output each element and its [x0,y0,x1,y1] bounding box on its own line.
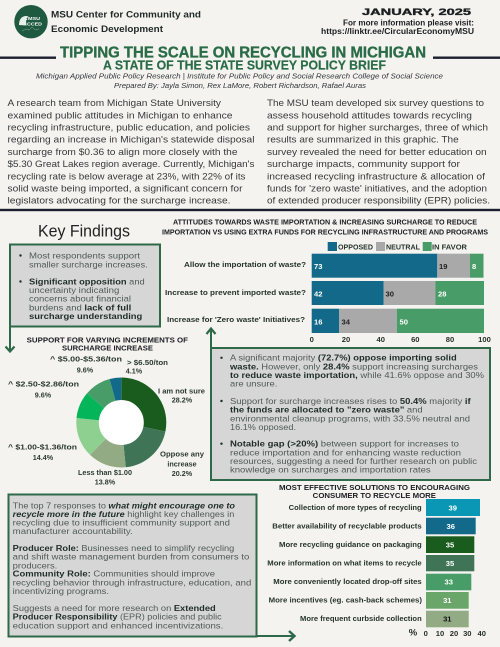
panel: key findings callout: Most respondents support [29,250,141,260]
axis: percent scale: 100 [478,335,491,344]
arrow: callout right to solutions chart [257,631,294,641]
bar chart: most effective solutions [267,499,486,638]
row: information on items: 35 [446,559,455,568]
row: collection of more types [289,499,480,516]
heading: attitudes chart title: ATTITUDES TOWARDS WASTE IMPORTATION & INCREASING SURCHARGE TO REDUCE [173,217,477,226]
panel: attitudes callout: resources, suggesting a need for further research on public [230,456,478,466]
heading: key findings: Key Findings [38,223,130,241]
panel: attitudes callout [211,348,490,480]
icon: MSU CCED logo: CCED [27,22,42,26]
donut chart labels: 13.8% [95,478,116,487]
date and link block: JANUARY, 2025 [362,7,471,17]
heading: solutions chart title: CONSUMER TO RECYCLE MORE [313,491,436,500]
row: collection of more types: 39 [448,504,457,512]
row: better availability [272,518,476,534]
panel: attitudes callout: to reduce waste importation, while 41.6% oppose and 30% [230,370,484,380]
panel: key findings callout: concerns about financial [29,294,131,304]
organisation name [51,10,201,35]
intro paragraph right: survey revealed the need for better education on [267,147,487,157]
date and link block: https://linktr.ee/CircularEconomyMSU [321,27,474,36]
row: increase to prevent imported waste: Increase to prevent imported waste? [165,288,307,297]
intro paragraph left: surcharge from $0.36 to align more closely with the [8,147,238,157]
row: collection of more types: Collection of more types of recycling [289,503,422,512]
axis: percent scale: 40 [477,629,486,638]
donut chart labels: 9.6% [35,391,52,400]
heading: attitudes chart title: IMPORTATION VS USING EXTRA FUNDS FOR RECYCLING INFRASTRUCTURE AND PROGRAMS [162,227,488,236]
donut chart labels [8,355,205,487]
panel: responses callout: Producer Role: Businesses need to simplify recycling [13,543,234,553]
row: allow importation: 73 [314,262,322,271]
legend: opposed, neutral, in favor: NEUTRAL [386,242,420,251]
panel: attitudes callout: environmental cleanup programs, with 33.5% neutral and [230,413,470,423]
intro paragraph left [8,98,255,206]
date and link block [321,7,474,36]
row: better availability: Better availability of recyclable products [272,522,422,531]
panel: attitudes callout: Notable gap (>20%) between support for increases to [230,439,459,449]
panel: responses callout: Producer Responsibility (EPR) policies and public [13,612,222,622]
panel: responses callout: recycling due to insufficient community support and [13,518,230,528]
icon: MSU CCED logo [14,5,48,38]
intro paragraph left: A research team from Michigan State University [8,98,221,108]
panel: attitudes callout: waste. However, only 28.4% support increasing surcharges [229,361,479,371]
row: allow importation: 19 [439,262,447,271]
title block [0,44,500,72]
axis: percent scale: 20 [342,335,350,344]
legend: opposed, neutral, in favor: IN FAVOR [432,242,468,251]
axis: percent scale: 60 [411,335,420,344]
panel: attitudes callout: Support for surcharge increases rises to 50.4% majority if [230,396,471,406]
donut chart labels: 4.1% [126,366,143,376]
panel: key findings callout: burdens and lack of full [29,302,131,312]
intro paragraph right: funds for 'zero waste' initiatives, and the adoption [267,184,487,194]
row: increase for zero waste: Increase for 'Zero waste' Initiatives? [167,315,306,324]
axis: percent scale [310,335,491,344]
donut chart labels: 28.2% [172,396,193,405]
intro paragraph right: results are summarized in this graphic. The [267,135,459,145]
axis: percent scale: 80 [446,335,454,344]
icon: MSU CCED logo: MSU [28,16,40,21]
row: curbside collection [300,611,469,627]
legend: opposed, neutral, in favor: OPPOSED [338,242,374,251]
row: allow importation: Allow the importation of waste? [184,260,307,269]
donut chart labels: 20.2% [172,469,193,478]
row: guidance on packaging: 35 [446,540,455,550]
row: allow importation [184,254,484,278]
panel: responses callout: and shift waste management burden from consumers to [13,552,249,562]
row: increase for zero waste [167,309,484,333]
donut chart labels: Oppose any [160,450,204,459]
row: increase to prevent imported waste: 42 [314,290,322,298]
intro paragraph right: and support for higher surcharges, three of which [267,122,488,132]
heading: donut chart title: SUPPORT FOR VARYING INCREMENTS OF [27,335,189,344]
panel: responses callout: education support and enhanced incentivizations. [13,620,223,630]
row: increase for zero waste: 34 [342,318,351,326]
panel: responses callout: The top 7 responses to what might encourage one to [13,500,236,510]
arrow: key findings down to donut chart [6,327,14,352]
panel: key findings callout: surcharge understanding [29,311,142,321]
panel: attitudes callout: are unsure. [230,379,277,389]
axis: percent scale: 40 [376,335,385,344]
heading: solutions chart title [279,483,470,500]
row: allow importation: 8 [472,262,476,271]
panel: attitudes callout: A significant majority (72.7%) oppose importing solid [230,353,457,363]
row: increase to prevent imported waste: 28 [438,290,446,298]
axis: percent scale: 30 [463,629,472,638]
panel: responses callout: producers. [13,560,57,570]
stacked bar chart: attitudes [165,254,491,344]
donut chart labels: Less than $1.00 [78,468,132,477]
row: drop-off sites: 33 [444,578,453,586]
panel: attitudes callout: reduce importation and for enhancing waste reduction [230,447,461,457]
intro paragraph left: legislators advocating for the surcharge increase. [8,196,230,206]
row: information on items [267,555,474,571]
panel: responses callout: recycle more in the future highlight key challenges in [13,509,234,519]
axis: percent scale: 0 [310,335,314,344]
intro paragraph left: recycling rate is below average at 23%, with 22% of its [8,171,246,181]
intro paragraph right: surcharge impacts, community support for [267,159,460,169]
row: information on items: More information on what items to recycle [267,559,422,568]
legend: opposed, neutral, in favor [328,242,468,251]
donut chart labels: ^ $2.50-$2.86/ton [8,380,79,389]
axis: percent scale [409,628,486,638]
axis: percent scale: % [409,628,418,638]
donut chart labels: ^ $1.00-$1.36/ton [8,442,77,451]
donut chart labels: increase [167,460,197,468]
panel: responses callout: Suggests a need for more research on Extended [13,603,216,613]
subtitle: A STATE OF THE STATE SURVEY POLICY BRIEF [103,58,386,72]
row: increase for zero waste: 50 [400,318,408,326]
axis: percent scale: 0 [424,629,428,638]
credits: Prepared By: Jayla Simon, Rex LaMore, Robert Richardson, Rafael Auras [114,81,366,90]
intro paragraph left: solid waste being imported, a significant concern for [8,184,242,194]
panel: attitudes callout: 16.1% opposed. [230,422,296,432]
row: guidance on packaging: More recycling guidance on packaging [279,540,422,549]
panel: responses callout: incentivizing programs. [13,586,109,596]
panel: key findings callout [10,244,160,326]
donut chart labels: 9.6% [77,366,94,375]
header: organisation logo and name [14,5,201,38]
donut chart labels: ^ $5.00-$5.36/ton [50,355,122,364]
main title: TIPPING THE SCALE ON RECYCLING IN MICHIGAN [60,44,426,62]
intro paragraph left: $5.30 Great Lakes region average. Currently, Michigan's [8,159,255,169]
panel: responses callout [8,494,256,636]
axis: percent scale: 20 [450,629,458,638]
heading: donut chart title: SURCHARGE INCREASE [62,343,153,352]
panel: responses callout: recycling behavior through infrastructure, education, and [13,577,251,587]
heading: solutions chart title: MOST EFFECTIVE SOLUTIONS TO ENCOURAGING [279,483,470,492]
row: better availability: 36 [446,522,455,531]
arrow: callout up to attitudes chart [206,328,216,349]
heading: donut chart title [27,335,189,352]
row: incentives: 31 [443,596,452,605]
intro paragraph right: assess household attitudes towards recycling [267,110,472,120]
panel: attitudes callout: the funds are allocated to "zero waste" and [230,405,423,415]
panel: key findings callout: smaller surcharge increases. [29,259,148,269]
credits [36,72,443,90]
intro paragraph left: regarding an increase in Michigan's statewide disposal [8,135,254,145]
organisation name: MSU Center for Community and [51,10,201,20]
date and link block: For more information please visit: [343,18,474,28]
intro paragraph right: of extended producer responsibility (EPR) policies. [267,196,490,206]
donut chart labels: I am not sure [158,386,205,395]
panel: responses callout: Community Role: Communities should improve [13,569,215,579]
row: increase to prevent imported waste: 30 [386,290,394,298]
panel: key findings callout: Significant opposition and [29,276,145,286]
row: guidance on packaging [279,536,474,553]
donut chart labels: > $6.50/ton [127,358,168,367]
intro paragraph right [267,98,490,206]
axis: percent scale: 10 [436,629,444,638]
row: incentives [269,592,469,609]
row: drop-off sites: More conveniently located drop-off sites [273,577,422,586]
panel: key findings callout: uncertainty indicating [29,285,119,295]
intro paragraph left: examined public attitudes in Michigan to enhance [8,110,233,120]
row: increase to prevent imported waste [165,281,484,305]
organisation name: Economic Development [51,24,164,35]
intro paragraph left: recycling infrastructure, public education, and policies [8,122,250,132]
heading: attitudes chart title [162,217,488,236]
panel: attitudes callout: knowledge on surcharges and importation rates [230,465,431,475]
donut chart labels: 14.4% [33,453,54,462]
intro paragraph right: increased recycling infrastructure & allocation of [267,171,485,181]
row: incentives: More incentives (eg. cash-back schemes) [269,596,423,605]
row: drop-off sites [273,574,471,590]
panel: responses callout: manufacturer accountability. [13,526,133,536]
row: curbside collection: 31 [443,614,452,624]
credits: Michigan Applied Public Policy Research | Institute for Public Policy and Social Research College of Social Science [36,72,443,81]
donut chart: surcharge support [76,378,166,468]
row: curbside collection: More frequent curbside collection [300,614,422,623]
intro paragraph right: The MSU team developed six survey questions to [267,98,484,108]
row: increase for zero waste: 16 [314,318,322,326]
